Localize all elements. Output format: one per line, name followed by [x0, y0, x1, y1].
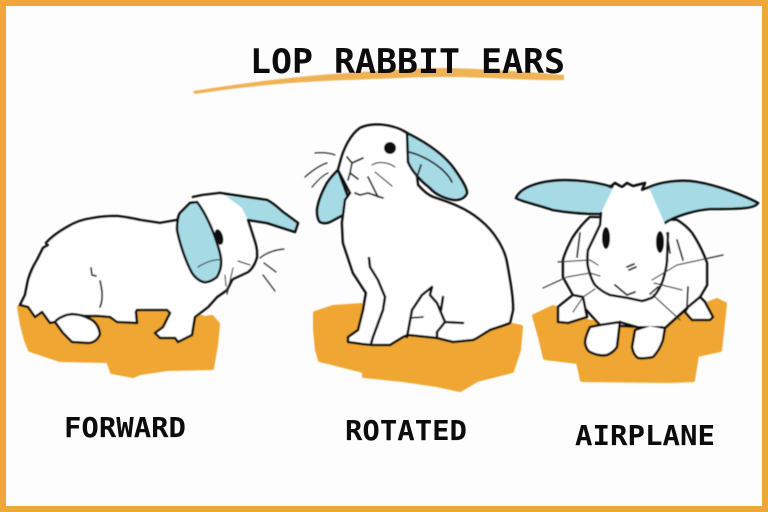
ear front: forward — [177, 202, 221, 282]
head top tuft: airplane — [601, 189, 668, 235]
rabbit: forward ears — [19, 193, 298, 376]
shoulders: airplane — [563, 217, 707, 328]
head: forward — [193, 193, 257, 280]
body: rotated — [338, 125, 513, 345]
legs and paws: rotated — [369, 258, 463, 344]
face details: rotated — [305, 153, 421, 198]
head: airplane — [587, 188, 668, 301]
ear back: rotated — [317, 170, 348, 223]
rabbit: rotated ears — [305, 125, 521, 390]
whiskers and details: forward — [91, 249, 284, 307]
ear top: forward — [226, 196, 298, 232]
back foot: forward — [55, 314, 100, 343]
ground patch: rotated — [315, 305, 521, 390]
eye: forward — [213, 228, 225, 246]
face and whiskers: airplane — [543, 213, 723, 320]
side paw right: airplane — [685, 297, 713, 320]
body: forward — [20, 216, 233, 342]
chest cover: airplane — [592, 290, 680, 326]
front paw right: airplane — [632, 325, 665, 358]
label: airplane: AIRPLANE — [575, 419, 715, 452]
side paw left: airplane — [558, 295, 587, 323]
right ear: airplane — [648, 181, 758, 223]
left ear: airplane — [516, 180, 613, 214]
ear front: rotated — [407, 133, 467, 200]
rabbit: airplane ears — [516, 180, 758, 381]
front paw left: airplane — [585, 322, 620, 355]
title underline brush stroke — [193, 68, 564, 94]
ground patch: airplane — [534, 300, 725, 381]
eyes: airplane — [602, 227, 664, 253]
ground patch: forward — [19, 305, 218, 376]
label: forward: FORWARD — [64, 411, 186, 444]
eye: rotated — [384, 142, 396, 154]
title: LOP RABBIT EARS — [250, 42, 565, 82]
label: rotated: ROTATED — [345, 414, 467, 447]
